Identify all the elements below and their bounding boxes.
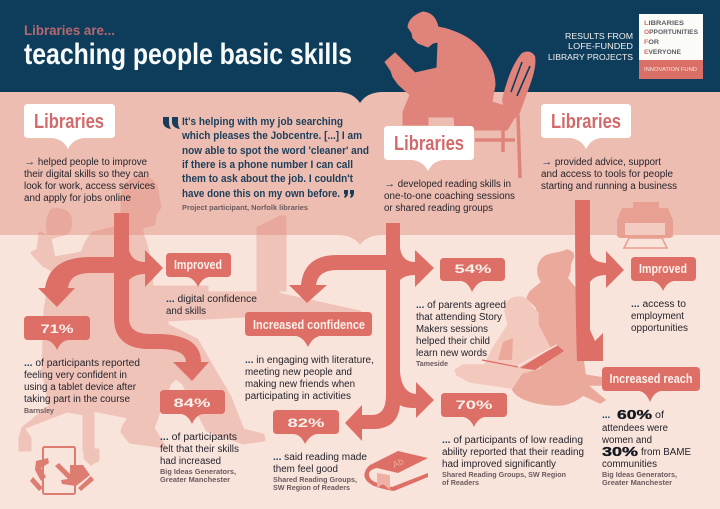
logo: innovation fund [639, 14, 703, 79]
text: parents agreed: Makers sessions [416, 324, 488, 335]
badge: improved digital [166, 253, 231, 287]
quote text: have done this on my own before. [182, 188, 340, 200]
arrow group: digital skills [38, 213, 209, 381]
illustration: woman at computer desk [20, 177, 360, 464]
text: employment access: ... access to [631, 299, 686, 310]
text: digital skills [24, 156, 155, 204]
text: engaging with literature: ... in engaging with literature, [245, 355, 374, 366]
quote text: them to ask about the job. I couldn't [182, 173, 353, 185]
quote text: if there is a phone number I can call [182, 159, 353, 171]
badge: increased reach: Increased reach [610, 372, 692, 386]
text: skills increased: Greater Manchester [160, 477, 230, 484]
text: employment access: opportunities [631, 323, 688, 334]
badge: 84%: 84% [174, 398, 210, 410]
header: results from [548, 31, 633, 62]
text: reach figures: ... [602, 410, 611, 421]
text: skills increased: Big Ideas Generators, [160, 469, 236, 476]
text: low reading ability: had improved significantly [442, 459, 556, 470]
arrow group: reading skills [289, 223, 434, 441]
arrow group: business support [575, 200, 624, 361]
text: digital skills: look for work, access services [24, 181, 155, 192]
text: reach figures: Big Ideas Generators, [602, 472, 677, 479]
text: digital confidence: and skills [166, 306, 206, 317]
text: employment access [631, 299, 688, 334]
text: low reading ability: ability reported that their reading [442, 447, 584, 458]
text: reading skills: → developed reading skills in [384, 178, 511, 190]
text: low reading ability: Shared Reading Groups, SW Region [442, 472, 566, 479]
quote text [181, 116, 369, 200]
text: reach figures [601, 408, 691, 487]
text: reach figures: from BAME [641, 447, 691, 458]
badge: 54%: 54% [454, 264, 492, 276]
text: low reading ability [442, 435, 584, 487]
text: parents agreed: Tameside [416, 361, 448, 368]
header: title: teaching people basic skills [24, 38, 352, 71]
header: results from: RESULTS FROM [565, 31, 633, 41]
badge: increased confidence [245, 312, 372, 347]
badge: 82%: 82% [288, 418, 324, 430]
text: reach figures: Greater Manchester [602, 480, 672, 487]
logo: innovation fund: EVERYONE [644, 50, 681, 56]
text: parents agreed [416, 300, 506, 368]
icon: book: Ab [391, 456, 405, 470]
text: engaging with literature: making new friends when [245, 379, 355, 390]
text: skills increased [160, 432, 239, 484]
text: tablet confidence: ... of participants reported [24, 358, 140, 369]
callout: libraries 1: Libraries [34, 111, 104, 133]
text: engaging with literature [245, 355, 374, 402]
illustration: printer [617, 202, 673, 248]
text: engaging with literature: meeting new people and [245, 367, 352, 378]
logo: innovation fund: OPPORTUNITIES [644, 30, 698, 36]
text: business support: → provided advice, support [541, 156, 661, 168]
text: reading feel good: Shared Reading Groups, [273, 477, 357, 484]
illustration: mother and child reading [455, 250, 605, 405]
quote text: which pleases the Jobcentre. [...] I am [181, 130, 362, 142]
header: results from: LOFE-FUNDED [568, 41, 633, 51]
logo: innovation fund: FOR [644, 40, 660, 46]
text: parents agreed: ... of parents agreed [416, 300, 506, 311]
callout: libraries 2: Libraries [394, 133, 464, 155]
text: employment access: employment [631, 311, 684, 322]
badge: improved employment [631, 257, 696, 291]
text: digital confidence [166, 294, 257, 317]
text: reading feel good: SW Region of Readers [273, 485, 350, 492]
quote text: It's helping with my job searching [182, 116, 343, 128]
logo: innovation fund: LIBRARIES [644, 21, 684, 27]
text: parents agreed: that attending Story [416, 312, 502, 323]
text: tablet confidence [24, 358, 140, 415]
text: business support: starting and running a business [541, 181, 677, 192]
text: digital skills: their digital skills so they can [24, 169, 149, 180]
text: tablet confidence: using a tablet device after [24, 382, 137, 393]
text: low reading ability: of Readers [442, 480, 479, 487]
text: reading feel good: them feel good [273, 464, 338, 475]
callout: libraries 3 [541, 104, 631, 149]
text: parents agreed: learn new words [416, 348, 487, 359]
header: results from: LIBRARY PROJECTS [548, 52, 633, 62]
text: low reading ability: ... of participants of low reading [442, 435, 583, 446]
text: business support: and access to tools for people [541, 169, 673, 180]
callout: libraries 2 [384, 126, 474, 171]
badge: improved digital: Improved [174, 258, 222, 272]
badge: 70% [441, 393, 507, 427]
text: tablet confidence: Barnsley [24, 408, 54, 415]
badge: increased confidence: Increased confidence [253, 318, 365, 332]
icon: book [364, 451, 428, 491]
badge: 82% [273, 410, 339, 444]
callout: libraries 1 [24, 104, 115, 149]
text: engaging with literature: participating in activities [245, 391, 351, 402]
badge: increased reach [602, 367, 700, 402]
logo: innovation fund: INNOVATION FUND [644, 67, 697, 73]
illustration: man reading on chair [385, 12, 535, 178]
text: reading skills: one-to-one coaching sessions [384, 191, 515, 202]
quote attribution: Project participant, Norfolk libraries [182, 205, 308, 212]
icon: tablet with hand [30, 447, 94, 494]
badge: improved employment: Improved [639, 262, 687, 276]
text: skills increased: ... of participants [160, 432, 237, 443]
icon: opening quote [163, 117, 180, 129]
text: digital skills: → helped people to improve [24, 156, 147, 168]
text: reach figures: women and [601, 435, 652, 446]
text: reading feel good [273, 452, 367, 492]
text: reach figures: attendees were [602, 423, 668, 434]
badge: 54% [440, 258, 505, 292]
icon: closing quote [344, 190, 354, 198]
text: reach figures: 60% [617, 408, 652, 422]
text: skills increased: had increased [160, 456, 221, 467]
quote text: now able to spot the word 'cleaner' and [182, 145, 369, 157]
text: reading skills: or shared reading groups [384, 203, 493, 214]
text: tablet confidence: feeling very confident in [24, 370, 127, 381]
text: business support [541, 156, 677, 192]
text: skills increased: felt that their skills [160, 444, 239, 455]
text: digital skills: and apply for jobs online [24, 193, 131, 204]
badge: 71% [24, 316, 90, 350]
text: reading feel good: ... said reading made [273, 452, 367, 463]
callout: libraries 3: Libraries [551, 111, 621, 133]
text: reach figures: 30% [602, 445, 638, 459]
text: reading skills [384, 178, 515, 214]
header: kicker: Libraries are... [24, 23, 115, 38]
badge: 70%: 70% [456, 400, 492, 412]
text: reach figures: of [655, 410, 664, 421]
text: reach figures: communities [602, 459, 657, 470]
text: tablet confidence: taking part in the course [24, 394, 130, 405]
text: parents agreed: helped their child [416, 336, 490, 347]
badge: 84% [160, 390, 225, 424]
text: digital confidence: ... digital confidence [166, 294, 257, 305]
badge: 71%: 71% [40, 324, 74, 336]
